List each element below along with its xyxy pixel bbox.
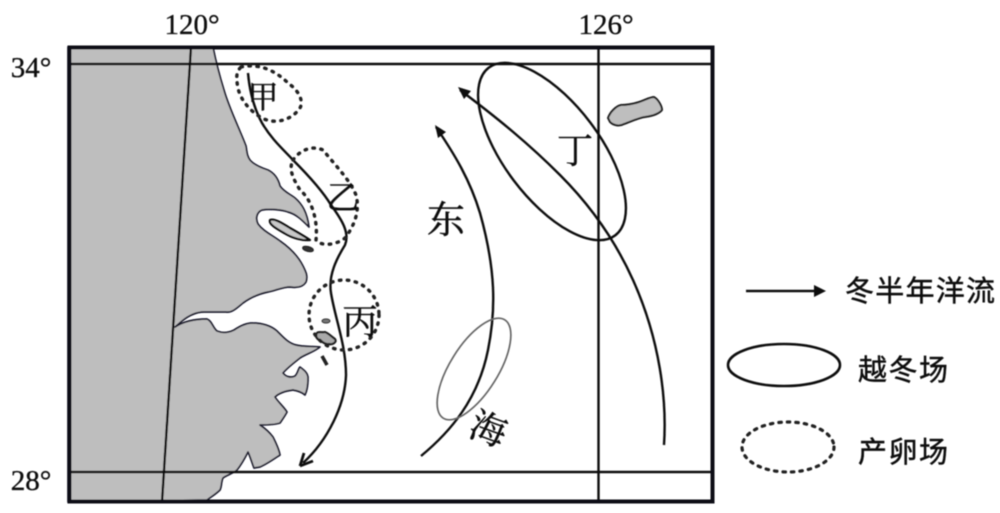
legend: current text: 冬半年洋流: [845, 275, 995, 308]
longitude 126: 126°: [578, 9, 634, 41]
longitude 120: 120°: [164, 9, 220, 41]
land: bay island: [270, 220, 310, 240]
legend: wintering text: 越冬场: [858, 354, 948, 387]
latitude 34: 34°: [11, 52, 51, 84]
legend: current arrow: [746, 285, 826, 297]
label yi: 乙: [326, 181, 360, 217]
wintering ground hai: [423, 307, 525, 431]
label dong: 东: [427, 200, 465, 242]
legend: spawning ellipse: [742, 422, 834, 472]
label hai: 海: [464, 405, 512, 455]
graticule lines: [68, 47, 713, 502]
spawning ground bing: [309, 280, 379, 350]
legend: [728, 275, 995, 472]
legend: spawning text: 产卵场: [858, 436, 948, 469]
coastal current arrow: [248, 73, 347, 466]
land: small islands: [302, 245, 336, 365]
map panel: [68, 39, 713, 502]
land: Jeju island: [608, 97, 662, 125]
map frame: [70, 48, 712, 502]
label jia: 甲: [248, 80, 278, 115]
axis labels: [11, 9, 634, 497]
latitude 28: 28°: [11, 465, 51, 497]
legend: wintering ellipse: [728, 344, 840, 386]
spawning ground yi: [291, 148, 357, 244]
land: mainland coast: [68, 47, 320, 502]
spawning ground jia: [237, 66, 301, 121]
wintering ground ding: [450, 39, 654, 264]
label bing: 丙: [342, 303, 378, 342]
East China Sea current arrow left: [421, 125, 493, 456]
East China Sea current arrow right: [458, 87, 665, 445]
label ding: 丁: [557, 131, 593, 171]
